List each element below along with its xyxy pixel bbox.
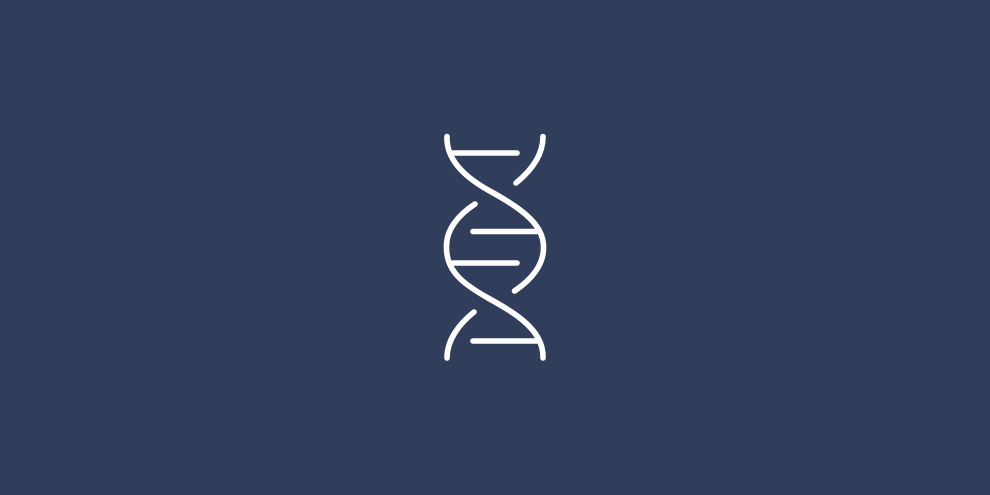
- rung 3: [453, 260, 517, 266]
- rung 1: [453, 150, 517, 156]
- rung 4: [473, 338, 537, 344]
- upper long strand: [447, 136, 544, 291]
- lower long strand: [446, 204, 543, 358]
- upper right strand fragment: [516, 136, 543, 183]
- icon: DNA double helix: [446, 136, 544, 358]
- rung 2: [473, 229, 537, 234]
- lower left strand fragment: [447, 312, 474, 358]
